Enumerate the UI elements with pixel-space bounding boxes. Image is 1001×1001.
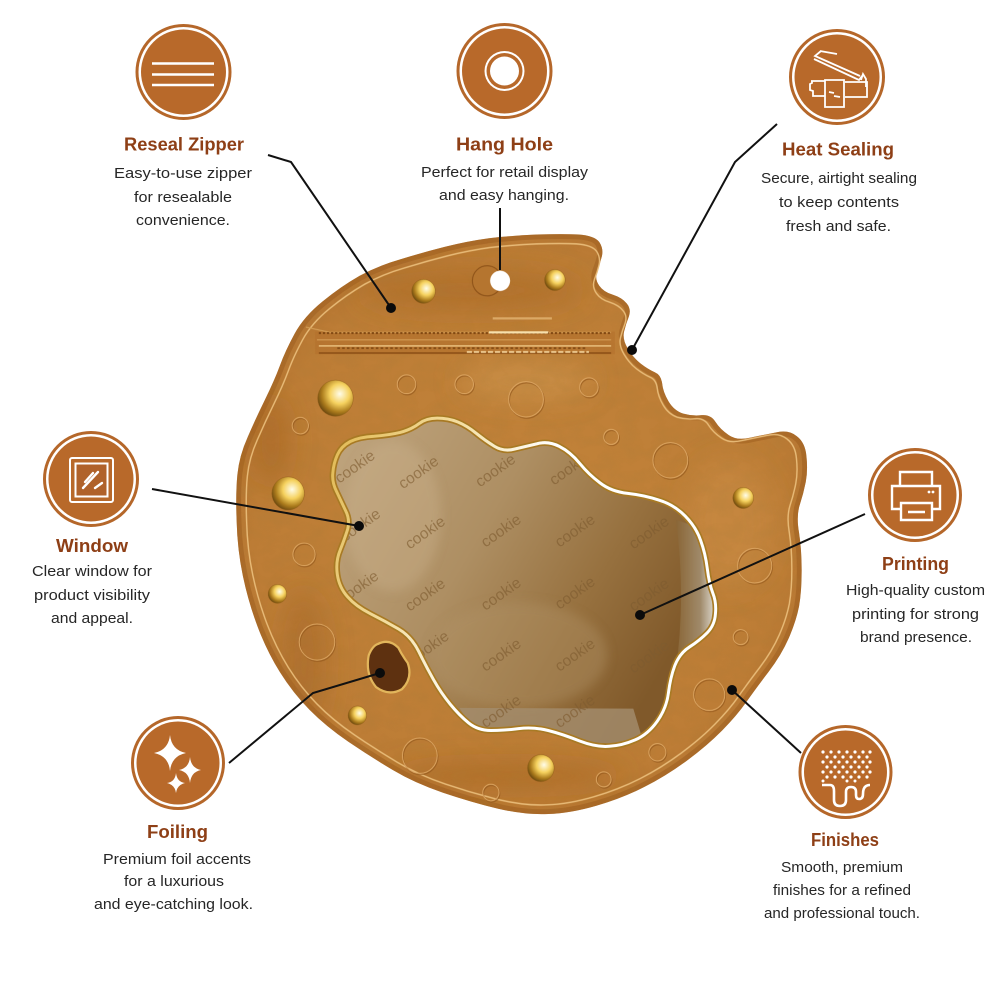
leader arrow (727, 685, 801, 753)
cookie watermark: cookie (552, 511, 598, 551)
heading: Reseal Zipper (124, 134, 244, 154)
text block: Smooth, premium (781, 859, 903, 876)
text block (114, 165, 252, 229)
text block: convenience. (136, 212, 230, 229)
hang hole (472, 266, 510, 296)
cookie watermark: cookie (626, 513, 672, 553)
cookie watermark: cookie (552, 692, 598, 732)
text block: and easy hanging. (439, 187, 569, 204)
foil dots (268, 270, 754, 782)
text block: fresh and safe. (786, 218, 891, 235)
cookie watermark: cookie (396, 453, 442, 493)
cookie watermark: cookie (626, 637, 672, 677)
cookie watermark: cookie (478, 511, 524, 551)
illustration: cookie-shaped pouch (230, 230, 810, 820)
icon: hang hole ring (458, 24, 551, 118)
icon: sparkles (132, 718, 224, 808)
cookie watermark: cookie (406, 628, 452, 668)
cookie watermark: cookie (552, 635, 598, 675)
heading: Hang Hole (456, 134, 553, 154)
text block (764, 859, 920, 922)
callout: Window (32, 432, 364, 627)
icon: window frame (44, 432, 138, 526)
window frame (333, 418, 716, 746)
text block: and professional touch. (764, 905, 920, 922)
callout: Hang Hole (421, 24, 589, 270)
cookie watermark: cookie (473, 451, 519, 491)
leader arrow (229, 668, 385, 763)
text block: brand presence. (860, 629, 972, 646)
heat seal line (246, 244, 797, 805)
cookie watermark: cookie (332, 447, 378, 487)
text block: for resealable (134, 189, 232, 206)
callout: Heat Sealing (627, 30, 917, 355)
callout: Reseal Zipper (114, 26, 396, 313)
icon: glossy drip finish (800, 726, 891, 818)
heading: Printing (882, 553, 949, 574)
text block: and eye-catching look. (94, 896, 253, 913)
text block (846, 582, 985, 646)
icon: zipper lines (137, 26, 230, 118)
leader arrow (627, 124, 777, 355)
cookie watermark: cookie (552, 573, 598, 613)
paper texture (574, 234, 798, 716)
text block: to keep contents (779, 194, 899, 211)
callout: Finishes (727, 685, 920, 922)
text block: for a luxurious (124, 873, 224, 890)
pouch body (236, 234, 807, 814)
reseal zipper (306, 318, 615, 354)
cookie watermark: cookie (478, 692, 524, 732)
leader arrow (499, 208, 501, 270)
text block: Secure, airtight sealing (761, 170, 917, 187)
embossed dots (292, 375, 772, 802)
right side fold (678, 522, 713, 653)
cookie watermark: cookie (402, 513, 449, 553)
leader arrow (635, 514, 865, 620)
bottom gusset (459, 708, 644, 746)
text block: Perfect for retail display (421, 164, 589, 181)
cookie watermark: cookie (478, 574, 524, 614)
leader arrow (268, 155, 396, 313)
icon: printer (870, 450, 960, 540)
pouch rim shading (236, 234, 807, 814)
cookie watermark: cookie (626, 575, 672, 615)
cookie watermark: cookie (478, 635, 524, 675)
text block (761, 170, 917, 235)
heading: Heat Sealing (782, 138, 894, 160)
text block (421, 164, 589, 204)
text block: product visibility (34, 587, 151, 604)
text block (32, 563, 152, 627)
callout: Foiling (94, 668, 385, 913)
window folds (345, 441, 607, 708)
text block: and appeal. (51, 610, 133, 627)
foil cookie hole (368, 642, 409, 692)
icon: heat sealer machine (790, 30, 884, 124)
cookie watermark (332, 447, 672, 732)
heading: Finishes (811, 829, 879, 850)
text block (94, 851, 253, 913)
leader arrow (152, 489, 364, 531)
text block: Easy-to-use zipper (114, 165, 252, 182)
text block: High-quality custom (846, 582, 985, 599)
text block: Clear window for (32, 563, 152, 580)
text block: Premium foil accents (103, 851, 251, 868)
heading: Window (56, 535, 129, 556)
cookie watermark: cookie (336, 568, 382, 608)
text block: printing for strong (852, 606, 979, 623)
wrinkle highlights (252, 270, 774, 789)
callout: Printing (635, 450, 985, 646)
cookie watermark: cookie (337, 505, 384, 546)
text block: finishes for a refined (773, 882, 911, 899)
cookie watermark: cookie (402, 575, 449, 615)
heading: Foiling (147, 821, 208, 842)
cookie watermark: cookie (547, 449, 593, 489)
clear window (332, 418, 717, 746)
